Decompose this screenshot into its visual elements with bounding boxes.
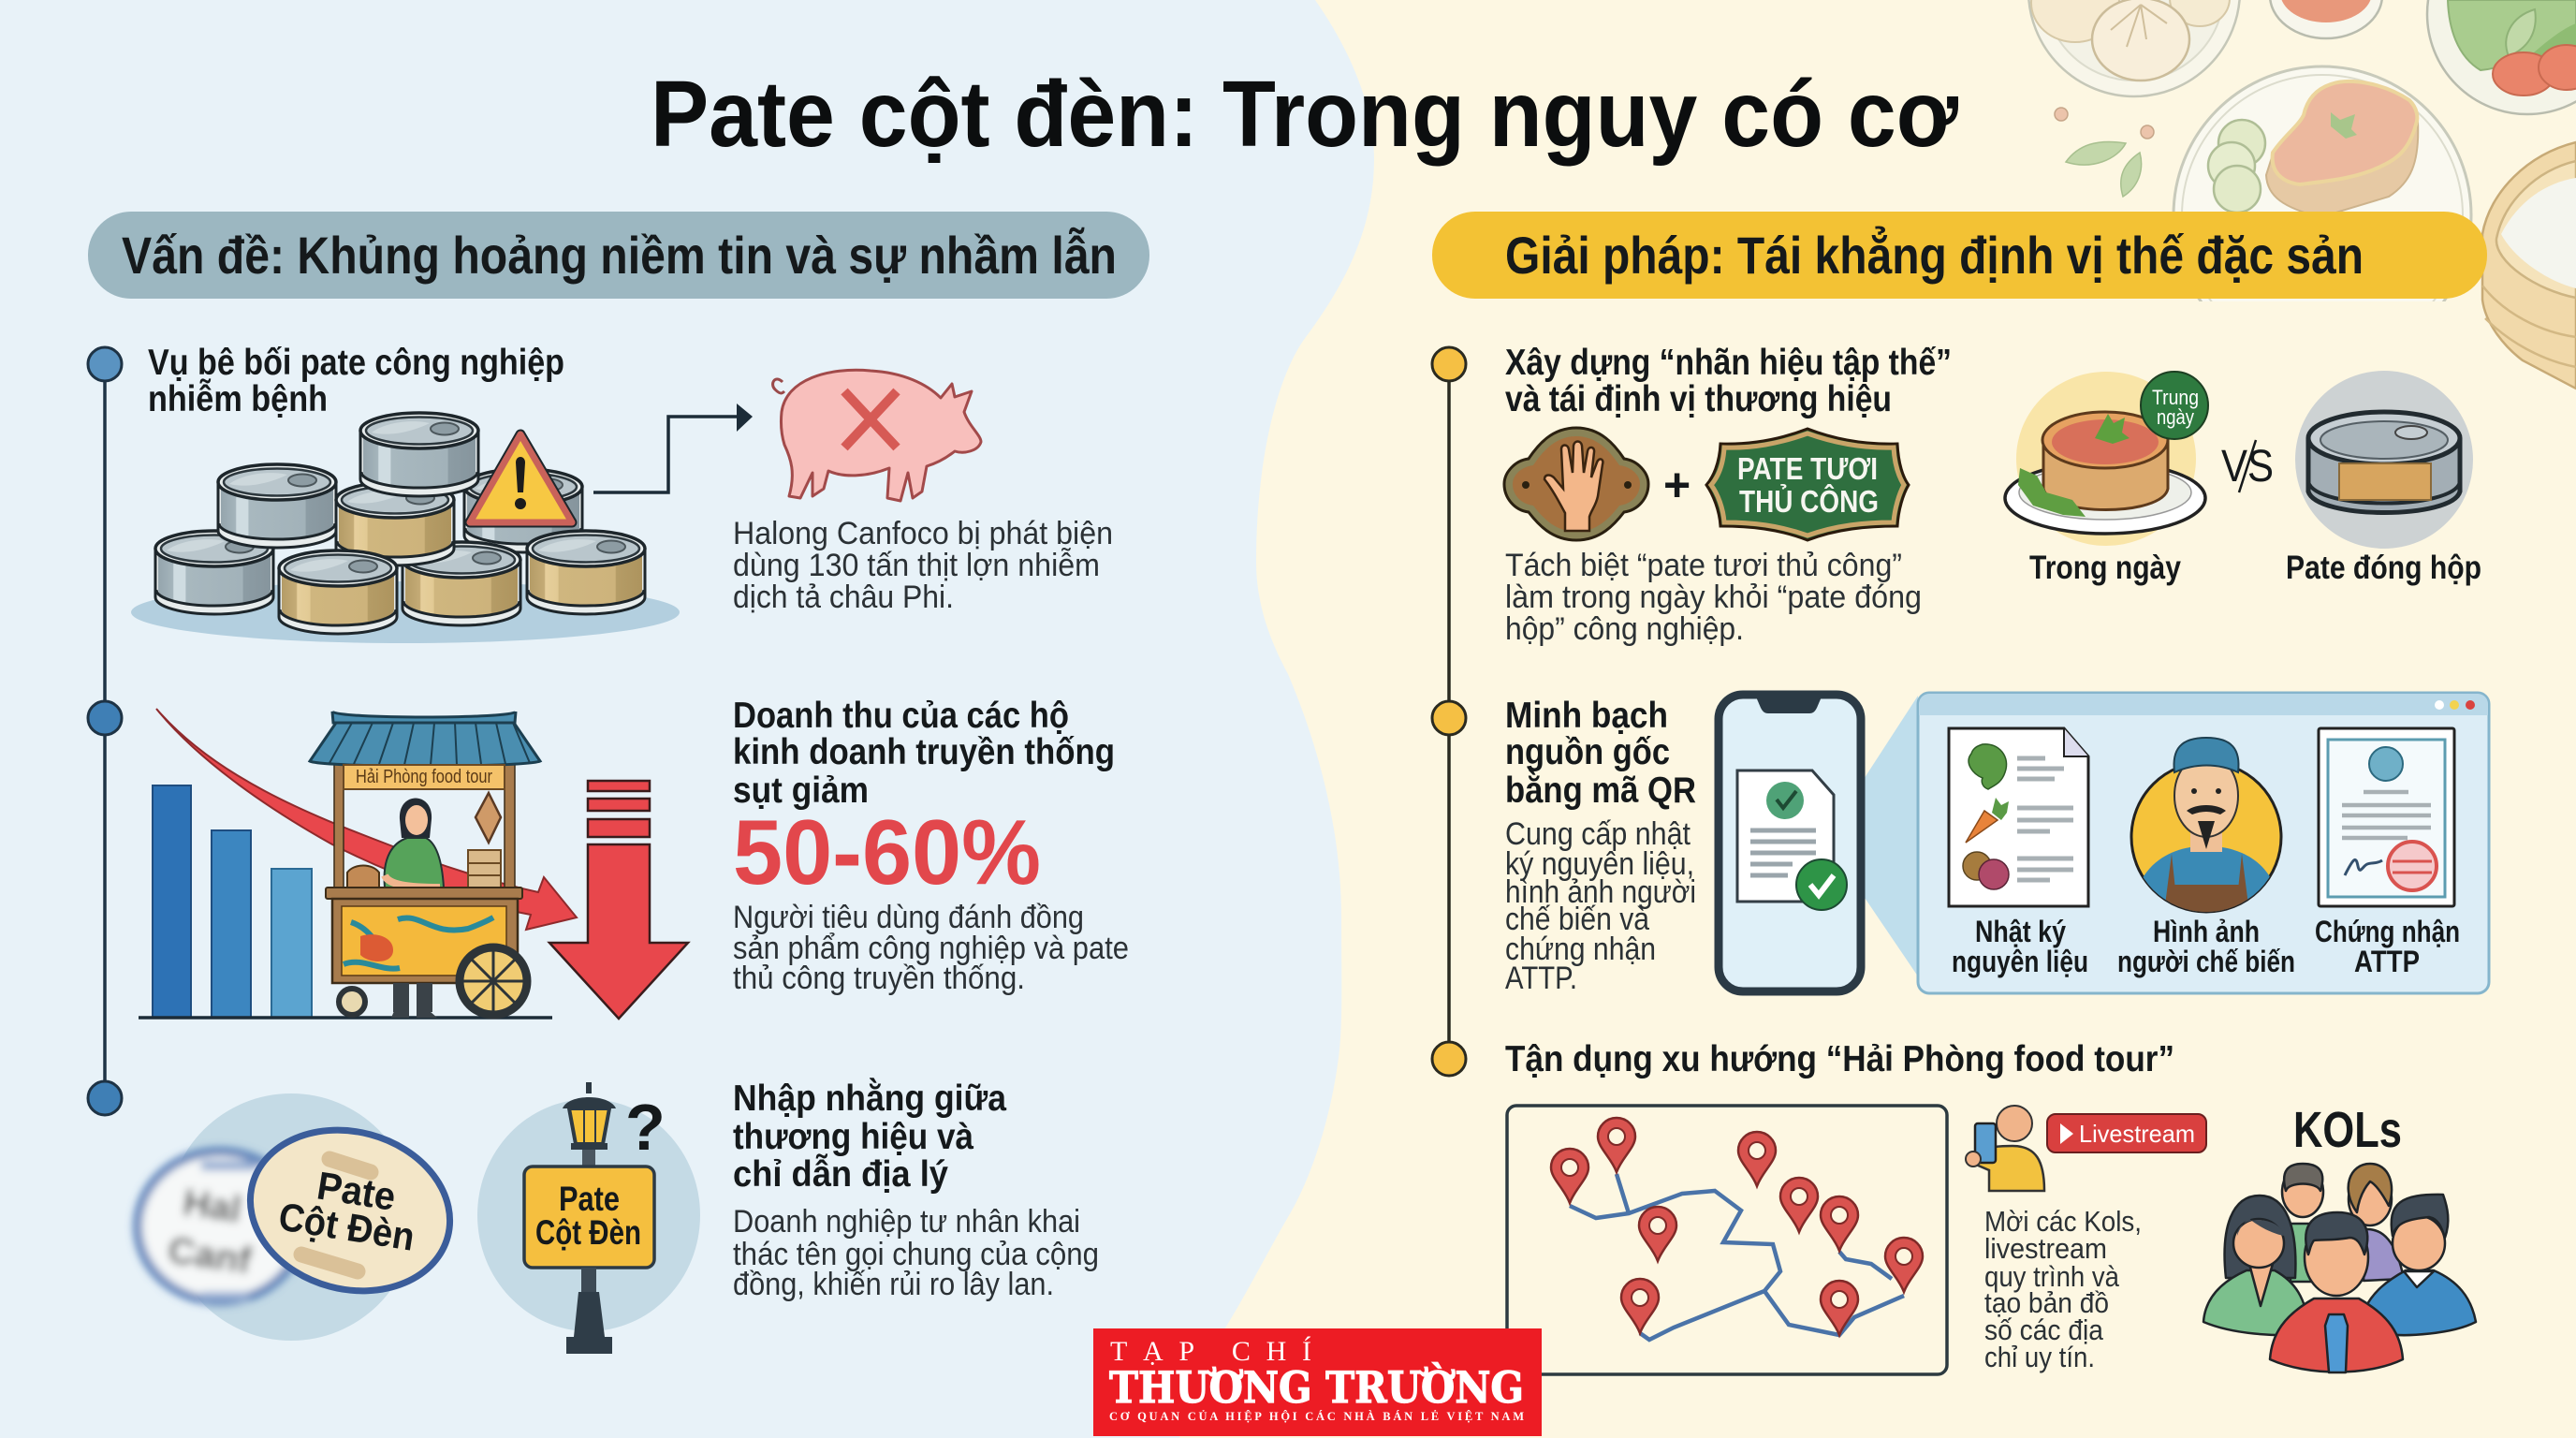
text: brand and geographic indication: chỉ dẫn địa lý	[733, 1153, 948, 1195]
salad plate	[2427, 0, 2576, 114]
text: QR description	[1505, 816, 1696, 996]
icon: canned pate	[2295, 371, 2473, 549]
heading: QR traceability: Minh bạch	[1505, 696, 1668, 736]
panel labels: Hình ảnh	[2153, 915, 2260, 948]
labels: same-day vs canned: Trong ngày	[2029, 550, 2181, 586]
section header: solution: Giải pháp: Tái khẳng định vị thế đặc sản	[1505, 226, 2364, 285]
text: QR description: hình ảnh người	[1505, 874, 1696, 910]
text: KOL description	[1984, 1205, 2142, 1373]
icon: stack of cans with warning	[131, 413, 680, 643]
panel labels: ATTP	[2354, 945, 2420, 978]
badge: fresh handmade pate: THỦ CÔNG	[1739, 483, 1879, 519]
heading: scandal: nhiễm bệnh	[148, 378, 328, 419]
map with route and pins	[1507, 1106, 1947, 1374]
heading: scandal	[148, 343, 564, 419]
badge: Livestream: Livestream	[2079, 1120, 2195, 1148]
icon: livestream presenter	[1966, 1106, 2044, 1191]
text: separation description	[1505, 548, 1922, 647]
panel labels	[1952, 915, 2460, 978]
text: KOL description: livestream	[1984, 1232, 2107, 1265]
scattered leaves and spices	[2055, 108, 2154, 197]
text: separation description: Tách biệt “pate tươi thủ công”	[1505, 548, 1902, 583]
section header: solution	[1432, 212, 2487, 299]
icon: lamp post sign with question mark: ?	[625, 1091, 666, 1164]
text: revenue drop: sụt giảm	[733, 770, 869, 811]
illustration: brand labels confusion	[138, 1093, 468, 1341]
panel: traceability details	[1918, 693, 2489, 993]
heading: collective brand: Xây dựng “nhãn hiệu tập thế”	[1505, 343, 1952, 383]
heading: QR traceability	[1505, 696, 1696, 811]
text: brand and geographic indication: đồng, khiến rủi ro lây lan.	[733, 1267, 1054, 1302]
badge: Livestream	[2047, 1114, 2206, 1152]
text: pig description: Halong Canfoco bị phát biện	[733, 516, 1113, 551]
panel labels: người chế biến	[2117, 945, 2295, 978]
icon: lamp post sign with question mark: Cột Đèn	[535, 1213, 641, 1252]
text: KOL description: quy trình và	[1984, 1260, 2120, 1293]
text: QR description: chế biến và	[1505, 902, 1649, 937]
text: QR description: ATTP.	[1505, 961, 1577, 996]
text: QR description: ký nguyên liệu,	[1505, 846, 1694, 882]
icon: lamp post sign with question mark	[477, 1082, 700, 1354]
text: QR description: chứng nhận	[1505, 932, 1656, 967]
bamboo steamer	[2482, 142, 2576, 389]
heading: QR traceability: bằng mã QR	[1505, 770, 1696, 811]
panel labels: Nhật ký	[1975, 915, 2066, 948]
plus sign: +	[1663, 459, 1690, 511]
text: pig description: dịch tả châu Phi.	[733, 580, 954, 615]
icon: street food cart	[310, 712, 540, 1018]
heading: KOLs: KOLs	[2293, 1102, 2402, 1158]
heading: QR traceability: nguồn gốc	[1505, 732, 1670, 772]
icon: pig with red cross	[773, 370, 981, 501]
left timeline	[88, 347, 122, 1115]
right man	[2365, 1195, 2476, 1335]
icon: food safety certificate	[2319, 728, 2454, 906]
text: revenue drop: Doanh thu của các hộ	[733, 696, 1069, 736]
text: pig description: dùng 130 tấn thịt lợn nhiễm	[733, 548, 1100, 583]
panel labels: Chứng nhận	[2315, 915, 2460, 948]
icon: same-day pate bowl	[2005, 372, 2208, 546]
text: pig description	[733, 516, 1113, 615]
section header: problem: Vấn đề: Khủng hoảng niềm tin và sự nhầm lẫn	[122, 226, 1117, 285]
logo: Tạp chí Thương Trường	[1093, 1328, 1542, 1436]
icon: same-day pate bowl: ngày	[2157, 405, 2194, 429]
heading: collective brand	[1505, 343, 1952, 419]
text: QR description: Cung cấp nhật	[1505, 816, 1690, 852]
illustration: brand labels confusion: Cột Đèn	[276, 1194, 417, 1259]
logo: Tạp chí Thương Trường: CƠ QUAN CỦA HIỆP HỘI CÁC NHÀ BÁN LẺ VIỆT NAM	[1109, 1410, 1524, 1423]
wedge from phone to panel	[1859, 696, 1918, 976]
back woman	[2349, 1164, 2404, 1281]
badge: fresh handmade pate	[1706, 429, 1909, 540]
text: brand and geographic indication: thác tên gọi chung của cộng	[733, 1237, 1099, 1272]
illustration: brand labels confusion: Hal	[181, 1181, 244, 1231]
heading: scandal: Vụ bê bối pate công nghiệp	[148, 343, 564, 383]
section header: problem	[88, 212, 1149, 299]
labels: same-day vs canned: Pate đóng hộp	[2286, 550, 2481, 586]
statistic: 50-60%: 50-60%	[733, 800, 1041, 903]
heading: collective brand: và tái định vị thương hiệu	[1505, 379, 1892, 419]
icon: same-day pate bowl: Trung	[2152, 386, 2199, 409]
text: brand and geographic indication	[733, 1078, 1099, 1302]
text: revenue drop: kinh doanh truyền thống	[733, 732, 1115, 772]
icon: phone with document	[1719, 695, 1861, 991]
left woman	[2203, 1196, 2309, 1335]
text: brand and geographic indication: thương hiệu và	[733, 1117, 973, 1157]
right timeline	[1432, 347, 1466, 1076]
labels: same-day vs canned	[2029, 550, 2481, 586]
title: Pate cột đèn: Trong nguy có cơ	[651, 62, 1959, 167]
text: consumers confusion: Người tiêu dùng đánh đồng	[733, 900, 1084, 935]
logo: Tạp chí Thương Trường: TẠP CHÍ	[1110, 1336, 1311, 1367]
text: brand and geographic indication: Doanh nghiệp tư nhân khai	[733, 1204, 1080, 1240]
icon: ingredient log	[1949, 728, 2088, 906]
back man	[2282, 1164, 2323, 1282]
arrow: cans to pig	[593, 404, 753, 492]
text: consumers confusion	[733, 900, 1129, 996]
panel labels: nguyên liệu	[1952, 945, 2088, 978]
icon: handmade badge	[1504, 428, 1648, 540]
heading: food tour trend: Tận dụng xu hướng “Hải Phòng food tour”	[1505, 1039, 2174, 1079]
text: brand and geographic indication: Nhập nhằng giữa	[733, 1078, 1006, 1119]
sauce bowl	[2270, 0, 2382, 38]
steamed buns plate	[2028, 0, 2240, 96]
text: KOL description: chỉ uy tín.	[1984, 1341, 2095, 1373]
icon: street food cart: Hải Phòng food tour	[356, 767, 492, 787]
bar chart: falling revenue	[139, 709, 577, 1018]
badge: fresh handmade pate: PATE TƯƠI	[1737, 451, 1878, 486]
versus label: VS	[2221, 442, 2274, 492]
text: separation description: làm trong ngày khỏi “pate đóng	[1505, 580, 1922, 615]
pate plate	[2172, 66, 2473, 301]
front man	[2270, 1212, 2403, 1372]
text: KOL description: tạo bản đồ	[1984, 1286, 2109, 1319]
text: separation description: hộp” công nghiệp.	[1505, 611, 1744, 647]
text: KOL description: số các địa	[1984, 1313, 2104, 1346]
logo: Tạp chí Thương Trường: THƯƠNG TRƯỜNG	[1109, 1361, 1524, 1413]
illustration: brand labels confusion: Pate	[315, 1163, 399, 1219]
icon: lamp post sign with question mark: Pate	[559, 1180, 620, 1218]
text: revenue drop	[733, 696, 1115, 811]
text: consumers confusion: thủ công truyền thống.	[733, 961, 1025, 996]
icon: group of KOLs	[2203, 1164, 2476, 1372]
icon: red down arrow	[549, 781, 688, 1019]
illustration: brand labels confusion: Canf	[166, 1229, 255, 1282]
text: consumers confusion: sản phẩm công nghiệp và pate	[733, 931, 1129, 966]
decorative food illustrations, top right	[2028, 0, 2576, 389]
background: light blue left side	[0, 0, 1374, 1438]
text: KOL description: Mời các Kols,	[1984, 1205, 2142, 1238]
icon: processor portrait	[2131, 738, 2281, 927]
